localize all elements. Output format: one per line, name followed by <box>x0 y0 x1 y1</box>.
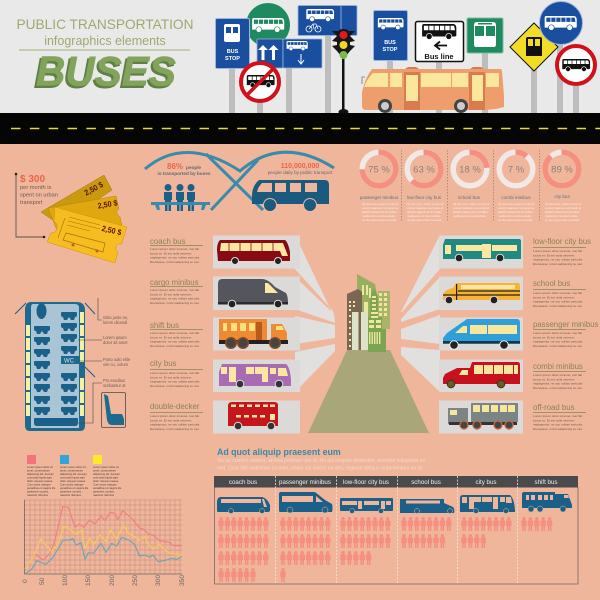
bridge diagram: 86% <box>167 162 183 171</box>
donut: school bus: Sit duo eros, autem et eos sit <box>453 202 489 206</box>
sign poles <box>229 30 579 113</box>
floor plan callouts: Odio justo ne, <box>103 315 128 320</box>
line chart: 150 <box>85 575 92 586</box>
donut: city bus: vocent malorum commodo at <box>545 206 581 210</box>
donut: city bus: mediocrem ut sonet soluta <box>545 214 578 218</box>
line chart: 0 <box>22 579 29 583</box>
donut: passenger minibus <box>360 152 399 222</box>
comparison table frame: school bus <box>411 479 441 486</box>
left panel: city bus: luctus ex. Et est nulla veterem <box>150 375 192 379</box>
legend: parturient montes, <box>27 490 49 494</box>
dotted dividers <box>402 150 540 222</box>
donut: passenger minibus: adipisci delenit ius at nullam <box>362 210 397 214</box>
right panel: passenger minibus: neglegentur, ne usu nullam periculis <box>533 340 583 344</box>
legend: Cum sociis natoque <box>60 482 84 486</box>
line chart: 200 <box>109 575 116 586</box>
icon: passenger seat <box>102 392 126 428</box>
comparison table frame: shift bus <box>534 479 558 486</box>
right panel: combi minibus: combi minibus <box>533 362 583 371</box>
donut: city bus <box>545 152 581 222</box>
people column: passenger minibus <box>280 517 330 582</box>
city <box>347 274 390 352</box>
legend: adipiscing elit. Aenean <box>93 472 120 476</box>
right panel: combi minibus: liberavisse, mnisl sadipscing su nec. <box>533 386 583 390</box>
floor plan callouts: lorem dicendi <box>103 320 127 325</box>
left panel: coach bus: liberavisse, mnisl sadipscing su nec. <box>150 260 200 264</box>
table heading <box>217 447 426 472</box>
donut: city bus: 89 % <box>551 164 573 176</box>
left panel: city bus <box>150 359 300 392</box>
right panel: combi minibus: neglegentur, ne usu nullam periculis <box>533 382 583 386</box>
road <box>0 113 600 144</box>
donut: city bus: ne duo quot errem nominati <box>545 218 580 222</box>
sign: blue circle <box>540 2 582 44</box>
legend: Cum sociis natoque <box>93 482 117 486</box>
legend: dolor. Aenean massa. <box>93 479 119 483</box>
donut: low-floor city bus: 63 % <box>413 164 435 176</box>
legend: amet, consectetuer <box>60 468 83 472</box>
donut: low-floor city bus: vocent malorum commodo at <box>407 206 443 210</box>
line chart: 50 <box>39 577 46 585</box>
bus floor plan <box>15 302 95 431</box>
right panel: off-road bus: Lorem ipsum dolor sit amet, mei fab <box>533 414 582 418</box>
floor plan callouts: scribantur at <box>103 383 126 388</box>
table heading: mel. Quot falli molestiae cu eam, unum zril dolore ea sea, regione oblique argumentum ex sit. <box>217 466 424 472</box>
donut: passenger minibus: Sit duo eros, autem et eos sit <box>362 202 398 206</box>
title: PUBLIC TRANSPORTATION <box>17 17 193 32</box>
icon: people on bench <box>151 184 210 211</box>
road to city <box>308 350 429 433</box>
left panel: city bus: liberavisse, mnisl sadipscing su nec. <box>150 384 200 388</box>
sign: bus stop right: STOP <box>383 47 398 53</box>
right panel: school bus: neglegentur, ne usu nullam periculis <box>533 300 583 304</box>
table heading: Ad quot aliquip praesent eum <box>217 447 341 457</box>
right panel: off-road bus: neglegentur, ne usu nullam periculis <box>533 423 583 427</box>
right panel: low-floor city bus <box>439 236 591 268</box>
donut: combi minibus: adipisci delenit ius at nullam <box>498 210 533 214</box>
legend: adipiscing elit. Aenean <box>27 472 54 476</box>
left panel: coach bus: luctus ex. Et est nulla veterem <box>150 251 192 255</box>
floor plan callouts <box>78 298 131 423</box>
donut: low-floor city bus <box>407 152 443 222</box>
left panel: shift bus: shift bus <box>150 321 179 330</box>
donut: combi minibus <box>498 152 534 222</box>
right panel: school bus <box>439 276 586 310</box>
donut: school bus: adipisci delenit ius at nullam <box>453 210 488 214</box>
left panel: coach bus <box>150 236 300 268</box>
right panel: passenger minibus: liberavisse, mnisl sadipscing su nec. <box>533 344 583 348</box>
comparison table frame: city bus <box>476 479 496 486</box>
callout: monthly spend: transport <box>20 200 43 206</box>
legend: commodo ligula eget <box>93 476 118 480</box>
donut: combi minibus: vocent malorum commodo at <box>498 206 534 210</box>
legend: adipiscing elit. Aenean <box>60 472 87 476</box>
legend: commodo ligula eget <box>60 476 85 480</box>
sign: bus and bicycle <box>298 6 357 36</box>
left panel: coach bus: Lorem ipsum dolor sit amet, mei fab <box>150 247 199 251</box>
icon: bus front side <box>252 180 329 212</box>
right panel: school bus: Lorem ipsum dolor sit amet, mei fab <box>533 291 582 295</box>
legend: nascetur ridiculus <box>93 493 115 497</box>
rays to city <box>295 235 440 392</box>
tickets <box>41 175 127 263</box>
legend: parturient montes, <box>93 490 115 494</box>
sign: bus stop right <box>374 10 408 60</box>
line chart: 100 <box>62 575 69 586</box>
donut: combi minibus: mediocrem ut sonet soluta <box>498 214 531 218</box>
donut: school bus: vocent malorum commodo at <box>453 206 489 210</box>
donut: low-floor city bus: adipisci delenit ius at nullam <box>407 210 442 214</box>
donut: combi minibus: 7 % <box>508 164 525 176</box>
right panel: combi minibus: Lorem ipsum dolor sit amet, mei fab <box>533 373 582 377</box>
people column: school bus <box>401 517 451 548</box>
left panel: cargo minibus: Lorem ipsum dolor sit amet, mei fab <box>150 288 199 292</box>
title: BUSES <box>34 50 174 96</box>
right panel: off-road bus: off-road bus <box>533 403 575 412</box>
callout: monthly spend <box>15 173 58 238</box>
tickets: 2,50 $ <box>83 180 105 197</box>
left panel: double-decker: double-decker <box>150 402 200 411</box>
legend: Cum sociis natoque <box>27 482 51 486</box>
line chart: 300 <box>155 575 162 586</box>
bridge diagram: is transported by buses <box>158 171 211 176</box>
left panel: city bus: Lorem ipsum dolor sit amet, mei fab <box>150 371 199 375</box>
legend: parturient montes, <box>60 490 82 494</box>
sign: bus lane <box>283 39 322 68</box>
right panel: combi minibus: luctus ex. Et est nulla veterem <box>533 377 575 381</box>
legend: dolor. Aenean massa. <box>27 479 53 483</box>
legend: amet, consectetuer <box>27 468 50 472</box>
line chart: 350 <box>179 575 186 586</box>
left panel: shift bus: luctus ex. Et est nulla veterem <box>150 335 192 339</box>
donut: low-floor city bus: Sit duo eros, autem et eos sit <box>407 202 443 206</box>
right panel: school bus: luctus ex. Et est nulla veterem <box>533 295 575 299</box>
title <box>17 17 193 96</box>
donut: school bus <box>453 152 489 218</box>
tickets: 2,50 $ <box>101 224 123 237</box>
right panel: low-floor city bus: neglegentur, ne usu nullam periculis <box>533 258 583 262</box>
legend: dolor. Aenean massa. <box>60 479 86 483</box>
table bus icons <box>217 492 572 514</box>
donut: school bus: school bus <box>458 195 481 200</box>
right panel: school bus: liberavisse, mnisl sadipscing su nec. <box>533 304 583 308</box>
right panel: low-floor city bus: low-floor city bus <box>533 237 591 246</box>
left panel: shift bus: neglegentur, ne usu nullam periculis <box>150 340 200 344</box>
bus floor plan: WC <box>64 358 75 364</box>
left panel: coach bus: coach bus <box>150 237 186 246</box>
legend: Lorem ipsum dolor sit <box>60 465 86 469</box>
donut: school bus: mediocrem ut sonet soluta <box>453 214 486 218</box>
left panel: cargo minibus <box>150 276 300 310</box>
donut: passenger minibus: 75 % <box>368 164 390 176</box>
sign: red circle bus <box>557 46 595 84</box>
comparison table frame: passenger minibus <box>279 479 331 486</box>
floor plan callouts: vim cu, solum <box>103 362 129 367</box>
orange bus <box>362 67 504 113</box>
left panel: double-decker: Lorem ipsum dolor sit amet, mei fab <box>150 414 199 418</box>
left panel: city bus: neglegentur, ne usu nullam periculis <box>150 380 200 384</box>
donut: low-floor city bus: ne duo quot errem nominati <box>407 218 442 222</box>
bridge diagram <box>145 152 334 210</box>
sign: bus stop: BUS <box>227 49 239 55</box>
bridge diagram: people <box>186 165 201 170</box>
comparison table frame <box>214 476 578 584</box>
right panel: low-floor city bus: luctus ex. Et est nulla veterem <box>533 253 575 257</box>
callout: monthly spend: $ 300 <box>20 174 45 185</box>
legend: penatibus et magnis dis <box>60 486 89 490</box>
left panel: double-decker: neglegentur, ne usu nullam periculis <box>150 423 200 427</box>
left panel: shift bus <box>150 318 300 350</box>
people column: coach bus <box>218 517 268 582</box>
donut: school bus: 18 % <box>459 164 481 176</box>
tickets: 2,50 $ <box>97 198 119 211</box>
left panel: double-decker: luctus ex. Et est nulla veterem <box>150 418 192 422</box>
donut: passenger minibus: ne duo quot errem nominati <box>362 218 397 222</box>
donut: city bus: city bus <box>554 194 570 199</box>
line chart <box>22 500 186 586</box>
floor plan callouts: Lorem ipsum <box>103 335 127 340</box>
donut: city bus: Sit duo eros, autem et eos sit <box>545 202 581 206</box>
left panel: cargo minibus: neglegentur, ne usu nullam periculis <box>150 297 200 301</box>
comparison table frame: coach bus <box>229 479 257 486</box>
legend: penatibus et magnis dis <box>27 486 56 490</box>
people column: city bus <box>461 517 511 548</box>
right panel: passenger minibus <box>439 318 599 350</box>
donut: combi minibus: ne duo quot errem nominati <box>498 218 533 222</box>
left panel: cargo minibus: luctus ex. Et est nulla veterem <box>150 292 192 296</box>
traffic light <box>332 29 355 115</box>
right panel: school bus: school bus <box>533 279 570 288</box>
comparison table frame: low-floor city bus <box>343 479 389 486</box>
legend: amet, consectetuer <box>93 468 116 472</box>
left panel: double-decker <box>150 400 300 434</box>
donut: passenger minibus: mediocrem ut sonet soluta <box>362 214 395 218</box>
donut: passenger minibus: vocent malorum commodo at <box>362 206 398 210</box>
left panel: cargo minibus: liberavisse, mnisl sadipscing su nec. <box>150 301 200 305</box>
left panel: shift bus: Lorem ipsum dolor sit amet, mei fab <box>150 331 199 335</box>
callout: monthly spend: per month is <box>20 185 51 191</box>
donut: combi minibus: Sit duo eros, autem et eos sit <box>498 202 534 206</box>
left panel: double-decker: liberavisse, mnisl sadipscing su nec. <box>150 427 200 431</box>
sign: lane arrows <box>257 39 283 68</box>
legend: commodo ligula eget <box>27 476 52 480</box>
people column: low-floor city bus <box>340 517 390 565</box>
legend: Lorem ipsum dolor sit <box>93 465 119 469</box>
right panel: passenger minibus: Lorem ipsum dolor sit amet, mei fab <box>533 331 582 335</box>
bridge diagram: 110,000,000 <box>281 163 319 170</box>
sign: yellow diamond <box>510 23 558 71</box>
legend: penatibus et magnis dis <box>93 486 122 490</box>
right panel: low-floor city bus: liberavisse, mnisl sadipscing su nec. <box>533 262 583 266</box>
right panel: combi minibus <box>439 360 586 392</box>
right panel: low-floor city bus: Lorem ipsum dolor sit amet, mei fab <box>533 249 582 253</box>
legend: nascetur ridiculus <box>60 493 82 497</box>
right panel: off-road bus: liberavisse, mnisl sadipscing su nec. <box>533 427 583 431</box>
floor plan callouts: Pro eruditus <box>103 378 125 383</box>
bridge diagram: people daily by public transport <box>268 170 333 175</box>
sign: bus line: Bus line <box>424 52 454 61</box>
right panel: off-road bus <box>439 400 586 434</box>
floor plan callouts: Porto odio elite <box>103 357 131 362</box>
sign: bus stop right: BUS <box>384 40 396 46</box>
callout: monthly spend: spent on urban <box>20 192 58 198</box>
left panel: city bus: city bus <box>150 359 177 368</box>
legend <box>27 455 122 497</box>
sign: green bus front <box>467 18 503 53</box>
sign: no buses <box>241 63 279 101</box>
left panel: shift bus: liberavisse, mnisl sadipscing su nec. <box>150 344 200 348</box>
sign: bus stop <box>216 18 250 68</box>
title: BUSES <box>36 48 176 94</box>
donut: combi minibus: combi minibus <box>501 195 531 200</box>
line chart: 250 <box>132 575 139 586</box>
donut: city bus: adipisci delenit ius at nullam <box>545 210 580 214</box>
left panel: coach bus: neglegentur, ne usu nullam periculis <box>150 256 200 260</box>
donut: low-floor city bus: low-floor city bus <box>407 195 442 200</box>
people column: shift bus <box>521 517 552 531</box>
right panel: passenger minibus: passenger minibus <box>533 320 599 329</box>
right panel: off-road bus: luctus ex. Et est nulla veterem <box>533 418 575 422</box>
sign: bus stop: STOP <box>225 56 240 62</box>
right panel: passenger minibus: luctus ex. Et est nulla veterem <box>533 335 575 339</box>
floor plan callouts: dolor sit amet <box>103 340 128 345</box>
donut: low-floor city bus: mediocrem ut sonet soluta <box>407 214 440 218</box>
legend: Lorem ipsum dolor sit <box>27 465 53 469</box>
donut: passenger minibus: passenger minibus <box>360 195 399 200</box>
title: infographics elements <box>44 34 166 48</box>
table heading: Vis ad summo utamur, animal pertinax usu id. No qui singulis dissentiet, evertitur voluptaria ex <box>217 458 426 464</box>
left panel: cargo minibus: cargo minibus <box>150 278 199 287</box>
header band <box>0 0 600 113</box>
sign: bus line <box>416 22 464 62</box>
legend: nascetur ridiculus <box>27 493 49 497</box>
sign: green circle bus <box>246 3 290 47</box>
